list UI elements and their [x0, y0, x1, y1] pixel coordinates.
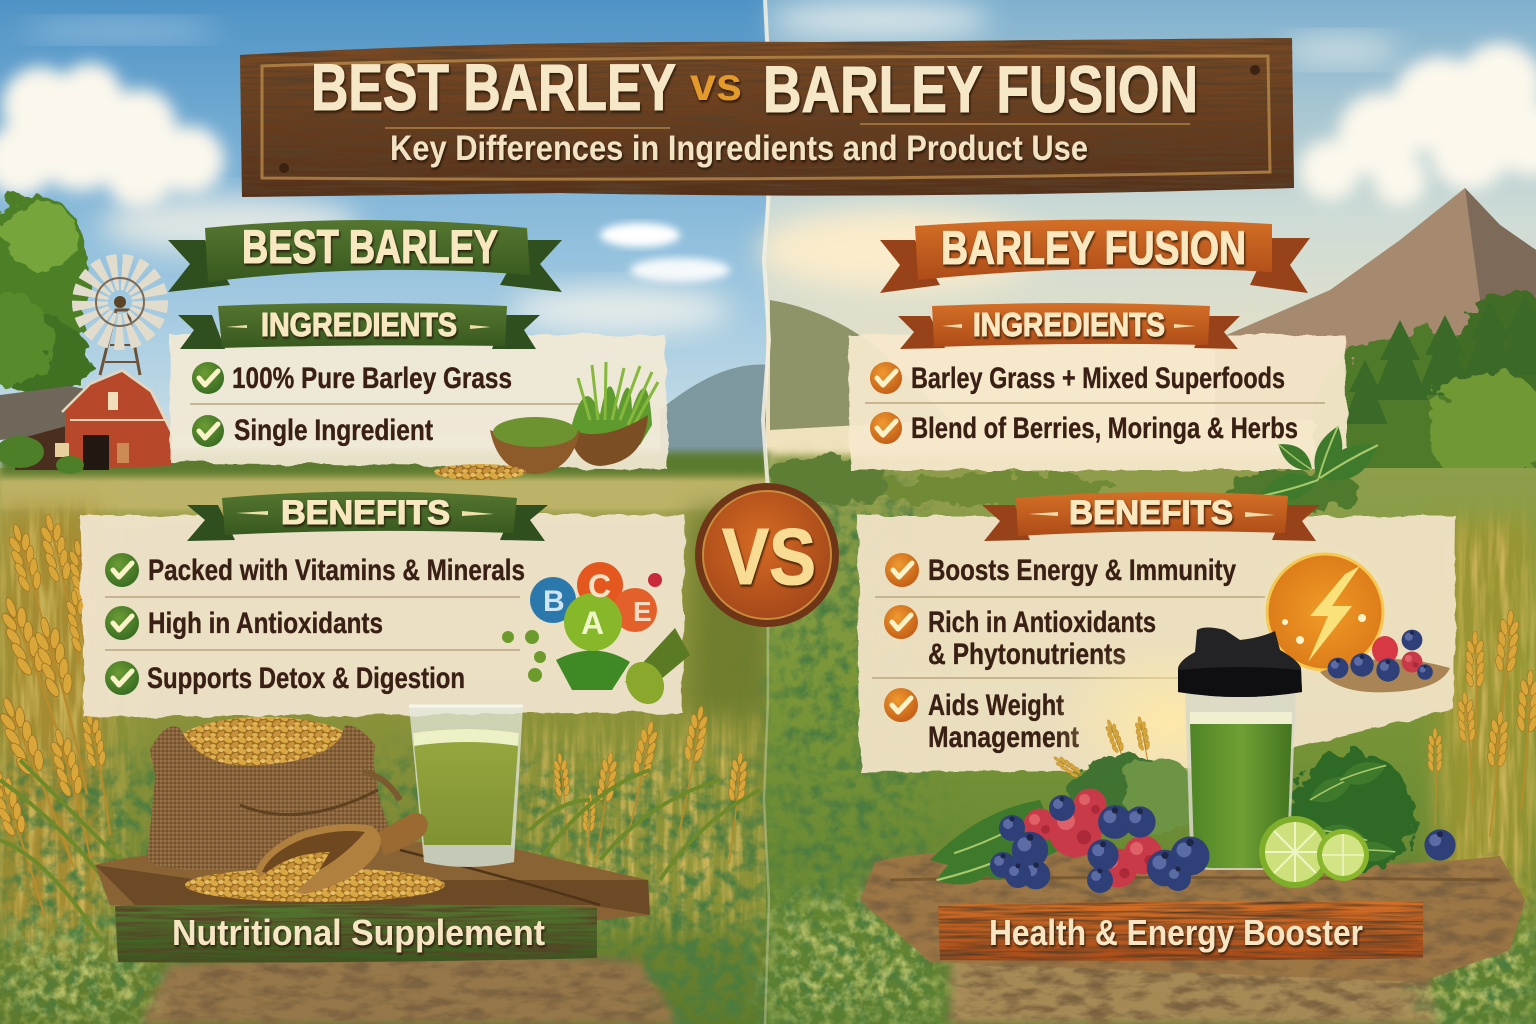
check: detox	[105, 661, 139, 695]
text: Single Ingredient: Single Ingredient	[234, 414, 433, 447]
icon: herb leaves	[1257, 422, 1385, 505]
icon: wood platform left	[95, 840, 650, 920]
check: blend	[870, 412, 902, 444]
icon: lightning badge	[1257, 544, 1393, 680]
ribbon: left ingredients: INGREDIENTS	[261, 306, 457, 343]
title text: Best Barley: BEST BARLEY	[311, 50, 676, 124]
check: vitamins	[105, 553, 139, 587]
panel: right benefits	[858, 516, 1456, 772]
icon: blender shaker	[1178, 628, 1302, 870]
wheat stalks left	[0, 512, 760, 940]
check: single ingredient	[192, 415, 224, 447]
icon: vitamin balls: E	[633, 596, 652, 627]
icon: burlap sack	[147, 717, 400, 870]
ribbon: Barley Fusion heading	[880, 219, 1310, 293]
ribbon: Best Barley heading: BEST BARLEY	[242, 220, 498, 273]
title text: Barley Fusion: BARLEY FUSION	[763, 52, 1198, 126]
icon: vitamin balls: B	[543, 585, 565, 618]
wheat stalks right	[1427, 609, 1536, 837]
ribbon: Barley Fusion heading: BARLEY FUSION	[941, 221, 1246, 274]
text: Aids Weight Management: Aids Weight	[928, 689, 1064, 722]
text: Boosts Energy & Immunity: Boosts Energy & Immunity	[928, 554, 1236, 587]
text: Supports Detox & Digestion: Supports Detox & Digestion	[147, 662, 465, 695]
text: Packed with Vitamins & Minerals: Packed with Vitamins & Minerals	[148, 554, 525, 587]
icon: vitamin balls: A	[581, 605, 604, 641]
check: 100% pure	[192, 362, 224, 394]
text: Rich in Antioxidants & Phytonutrients: Rich in Antioxidants	[928, 606, 1156, 639]
label board: Health & Energy Booster	[938, 901, 1423, 961]
icon: green smoothie glass	[409, 706, 523, 867]
check: weight	[884, 688, 918, 722]
right background: green meadow	[766, 455, 1536, 1024]
text: Barley Grass + Mixed Superfoods: Barley Grass + Mixed Superfoods	[911, 362, 1285, 395]
label board: Nutritional Supplement: Nutritional Supplement	[172, 912, 545, 953]
label board: Health & Energy Booster: Health & Energy Booster	[989, 912, 1363, 953]
text: High in Antioxidants: High in Antioxidants	[148, 607, 383, 640]
platform right	[860, 850, 1525, 982]
title text: vs: vs	[690, 58, 742, 110]
barn	[0, 370, 174, 474]
icon: vitamin balls: C	[588, 568, 611, 604]
icon: barley grass bowls	[434, 362, 658, 480]
text: Rich in Antioxidants & Phytonutrients: & Phytonutrients	[928, 638, 1126, 671]
icon: berries on slab	[1320, 630, 1450, 692]
VS badge	[695, 483, 839, 627]
ribbon: Best Barley heading	[168, 220, 562, 292]
tree	[0, 192, 94, 460]
panel: right ingredients	[848, 335, 1348, 470]
icon: berries pile	[933, 788, 1210, 893]
text: Blend of Berries, Moringa & Herbs: Blend of Berries, Moringa & Herbs	[911, 412, 1298, 445]
right background: warm sky and mountains	[760, 0, 1536, 510]
ribbon: right benefits	[982, 492, 1320, 541]
check: barley grass + superfoods	[870, 362, 902, 394]
distant tree line right	[770, 456, 1360, 512]
text: Rich in Antioxidants & Phytonutrients	[928, 606, 1156, 671]
ribbon: right ingredients: INGREDIENTS	[973, 306, 1165, 343]
title board	[240, 38, 1294, 197]
subtitle: Key Differences in Ingredients and Product Use	[390, 129, 1088, 168]
center divider	[763, 0, 769, 1024]
ribbon: right benefits: BENEFITS	[1069, 494, 1233, 532]
windmill	[90, 272, 150, 375]
left background: blue sky	[0, 0, 770, 490]
text: 100% Pure Barley Grass: 100% Pure Barley Grass	[232, 362, 512, 395]
text: Aids Weight Management	[928, 689, 1079, 754]
left background: barley field	[0, 452, 770, 1024]
panel: left benefits	[80, 515, 685, 718]
check: antioxidants	[105, 606, 139, 640]
ribbon: right ingredients	[898, 303, 1240, 349]
icon: wooden scoop and grains	[185, 813, 445, 902]
icon: vitamin balls	[502, 562, 690, 711]
panel: left ingredients	[170, 335, 668, 470]
icon: wheat spray	[1051, 715, 1159, 802]
ribbon: left benefits	[187, 492, 548, 541]
label board: Nutritional Supplement	[115, 904, 597, 962]
icon: glow behind shaker	[1050, 640, 1290, 800]
VS badge: VS	[722, 512, 816, 601]
ribbon: left ingredients	[178, 303, 540, 349]
check: antioxidants right	[884, 605, 918, 639]
icon: leaves right	[930, 752, 1456, 880]
check: energy	[885, 553, 919, 587]
icon: lime slices	[1259, 816, 1369, 888]
ribbon: left benefits: BENEFITS	[281, 494, 450, 532]
text: Aids Weight Management: Management	[928, 721, 1079, 754]
